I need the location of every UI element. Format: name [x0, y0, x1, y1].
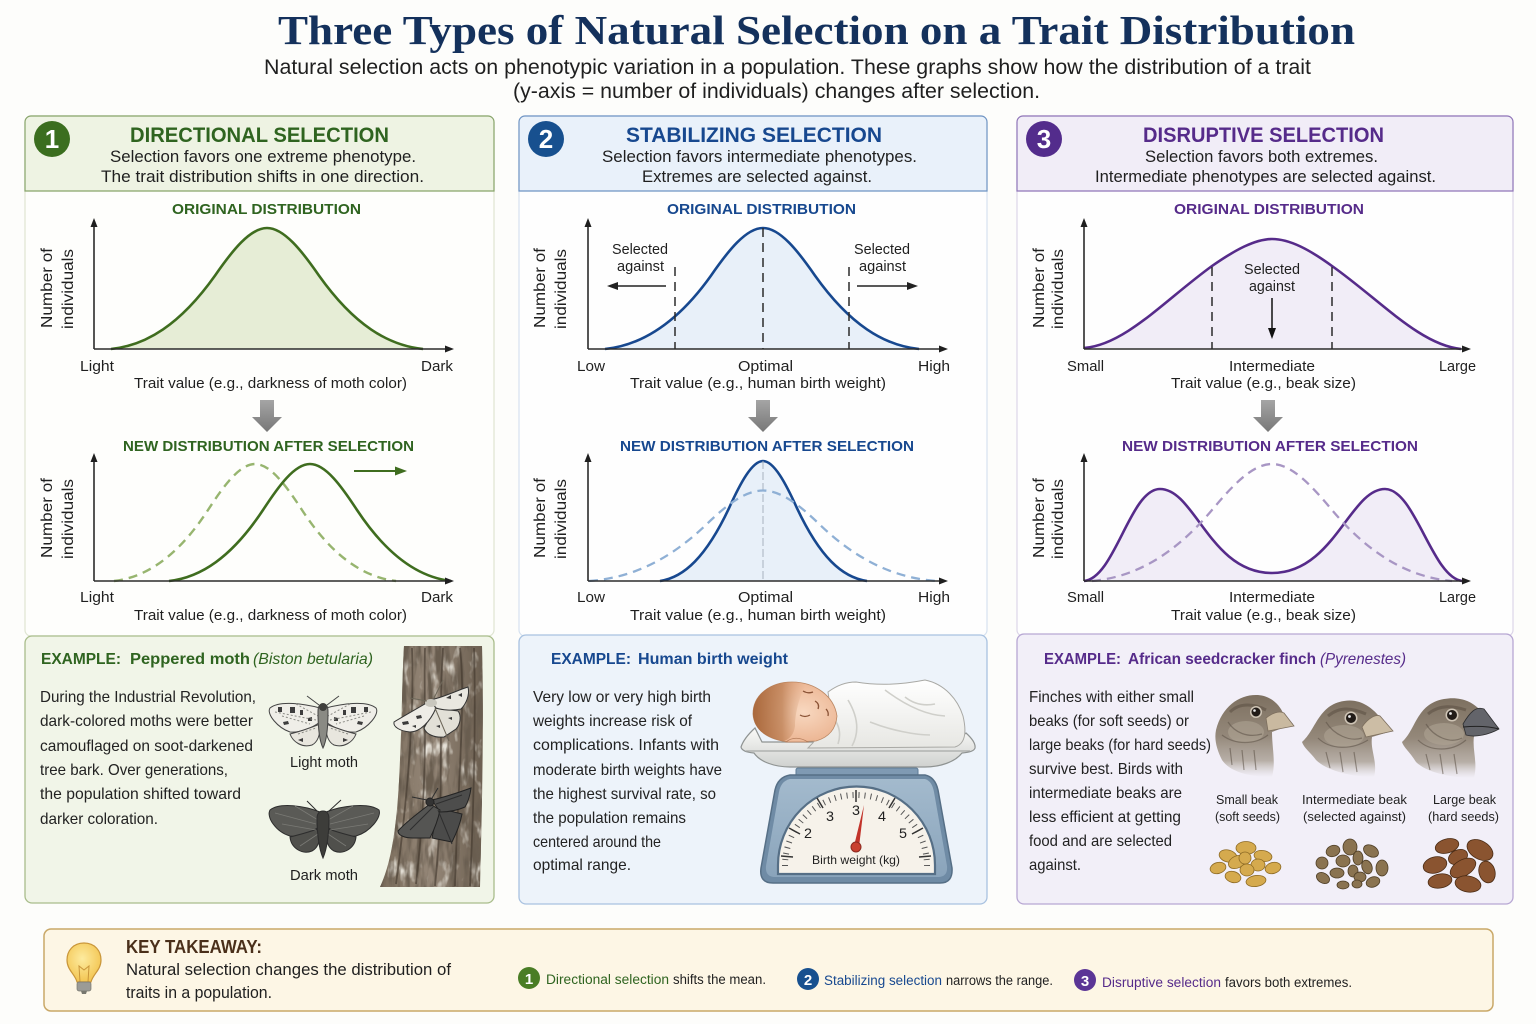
panel: example peppered moth: [25, 636, 494, 903]
example text: the population shifted toward: [40, 786, 241, 803]
example text: against.: [1029, 857, 1081, 874]
chart: original distribution, directional: ORIGINAL DISTRIBUTION: [172, 201, 361, 218]
scale body: 3: [852, 802, 860, 818]
labels: beak types: Intermediate beak: [1302, 792, 1407, 807]
example text: intermediate beaks are: [1029, 785, 1182, 802]
chart: new distribution, disruptive: Intermediate: [1229, 589, 1315, 606]
summary: disruptive: Disruptive selection: [1102, 975, 1221, 990]
callout: selected against, left: [607, 242, 668, 290]
chart: new distribution, directional: Number of: [39, 477, 56, 558]
callout: selected against, center: against: [1249, 279, 1295, 295]
callout: selected against, right: [854, 242, 918, 290]
header: directional selection: [25, 116, 494, 191]
icon: small-beak finch: [1215, 695, 1294, 777]
example heading: [551, 651, 789, 668]
icon: light bulb: [67, 943, 101, 994]
icon: dark moth on bark: [398, 788, 471, 844]
chart: new distribution, stabilizing: [532, 438, 950, 624]
chart: original distribution, directional: Dark: [421, 358, 454, 375]
chart: new distribution, disruptive: Trait value (e.g., beak size): [1171, 607, 1356, 624]
example heading: (Pyrenestes): [1320, 651, 1406, 668]
chart: original distribution, disruptive: Small: [1067, 358, 1104, 375]
icon: light moth: [269, 696, 377, 748]
example text: less efficient at getting: [1029, 809, 1181, 826]
header: stabilizing selection: Extremes are selected against.: [642, 168, 872, 186]
chart: original distribution, directional: Light: [80, 358, 115, 375]
scale body: 5: [899, 825, 907, 841]
header: stabilizing selection: 2: [539, 124, 553, 154]
arrow: original to new, stabilizing: [748, 400, 778, 432]
icon: intermediate-beak finch: [1302, 700, 1393, 777]
summary: directional: shifts the mean.: [673, 972, 766, 987]
labels: beak types: [1215, 792, 1499, 824]
chart: new distribution, directional: NEW DISTRIBUTION AFTER SELECTION: [123, 438, 414, 455]
example text: [40, 689, 256, 828]
example text: [1029, 689, 1211, 874]
example text: tree bark. Over generations,: [40, 762, 228, 779]
chart: new distribution, directional: individuals: [60, 479, 77, 559]
chart: original distribution, directional: individuals: [60, 249, 77, 329]
panel: stabilizing selection: [519, 116, 987, 636]
chart: new distribution, directional: [39, 438, 454, 624]
chart: original distribution, stabilizing: ORIGINAL DISTRIBUTION: [667, 201, 856, 218]
scale body: 2: [804, 825, 812, 841]
chart: new distribution, stabilizing: High: [918, 589, 950, 606]
chart: original distribution, stabilizing: Low: [577, 358, 605, 375]
example heading: [41, 651, 373, 668]
example text: Finches with either small: [1029, 689, 1194, 706]
header: directional selection: 1: [45, 124, 59, 154]
example text: moderate birth weights have: [533, 762, 722, 779]
example heading: Human birth weight: [638, 651, 789, 668]
summary: directional: [518, 967, 766, 989]
title: Three Types of Natural Selection on a Trait Distribution: [278, 7, 1355, 53]
header: directional selection: The trait distribution shifts in one direction.: [101, 168, 424, 186]
icon: large hard seeds: [1421, 835, 1498, 894]
chart: original distribution, stabilizing: individuals: [553, 249, 570, 329]
example heading: [1044, 651, 1406, 668]
chart: original distribution, directional: Trait value (e.g., darkness of moth color): [134, 375, 407, 392]
baby: [753, 680, 965, 748]
header: stabilizing selection: [519, 116, 987, 191]
chart: original distribution, disruptive: ORIGINAL DISTRIBUTION: [1174, 201, 1364, 218]
key takeaway text: traits in a population.: [126, 984, 272, 1002]
example text: centered around the: [533, 834, 661, 851]
icon: light moth on bark: [394, 680, 469, 741]
callout: selected against, right: Selected: [854, 242, 910, 258]
scale body: 4: [878, 808, 886, 824]
example text: darker coloration.: [40, 811, 158, 828]
arrow: original to new, disruptive: [1253, 400, 1283, 432]
chart: new distribution, stabilizing: Low: [577, 589, 605, 606]
icon: small soft seeds: [1209, 842, 1282, 888]
example text: complications. Infants with: [533, 737, 719, 754]
panel: directional selection: [25, 116, 494, 636]
panel: example african seedcracker finch: [1017, 634, 1513, 904]
header: disruptive selection: 3: [1037, 124, 1051, 154]
icon: intermediate seeds: [1314, 839, 1388, 889]
example text: During the Industrial Revolution,: [40, 689, 256, 706]
subtitle: [264, 56, 1311, 103]
illustration: tree with moths: [380, 646, 483, 887]
callout: selected against, right: against: [859, 259, 906, 275]
header: stabilizing selection: STABILIZING SELECTION: [626, 124, 882, 147]
header: disruptive selection: Selection favors both extremes.: [1145, 148, 1378, 166]
example heading: (Biston betularia): [253, 651, 373, 668]
callout: selected against, center: Selected: [1244, 262, 1300, 278]
callout: selected against, left: Selected: [612, 242, 668, 258]
chart: new distribution, directional: Dark: [421, 589, 454, 606]
summary: directional: 1: [525, 971, 533, 988]
chart: original distribution, stabilizing: High: [918, 358, 950, 375]
subtitle: Natural selection acts on phenotypic variation in a population. These graphs show how the distribution of a trait: [264, 56, 1311, 79]
chart: original distribution, disruptive: individuals: [1050, 249, 1067, 329]
summary: directional: Directional selection: [546, 972, 669, 987]
scale body: 3: [826, 808, 834, 824]
chart: new distribution, directional: Light: [80, 589, 115, 606]
icon: dark moth: [269, 800, 379, 858]
example text: the population remains: [533, 810, 686, 827]
label: dark moth: Dark moth: [290, 868, 358, 884]
chart: new distribution, disruptive: Large: [1439, 589, 1476, 606]
illustration: baby on scale: [741, 680, 975, 883]
key takeaway text: KEY TAKEAWAY:: [126, 937, 262, 957]
example text: dark-colored moths were better: [40, 713, 254, 730]
example text: weights increase risk of: [532, 713, 693, 730]
example heading: African seedcracker finch: [1128, 651, 1316, 668]
chart: original distribution, directional: [39, 201, 454, 392]
header: disruptive selection: DISRUPTIVE SELECTION: [1143, 124, 1384, 147]
example text: Very low or very high birth: [533, 689, 711, 706]
callout: selected against, center: [1244, 262, 1300, 339]
chart: original distribution, stabilizing: [532, 201, 950, 392]
chart: new distribution, stabilizing: NEW DISTRIBUTION AFTER SELECTION: [620, 438, 914, 455]
chart: new distribution, stabilizing: Number of: [532, 477, 549, 558]
callout: selected against, left: against: [617, 259, 664, 275]
labels: beak types: (hard seeds): [1428, 809, 1499, 824]
summary: disruptive: [1074, 969, 1352, 991]
panel: disruptive selection: [1017, 116, 1513, 636]
labels: beak types: (selected against): [1303, 809, 1406, 824]
example text: the highest survival rate, so: [533, 786, 716, 803]
example heading: EXAMPLE:: [41, 651, 121, 668]
example text: optimal range.: [533, 857, 631, 874]
key takeaway text: Natural selection changes the distribution of: [126, 961, 451, 979]
summary: stabilizing: Stabilizing selection: [824, 973, 942, 988]
header: stabilizing selection: Selection favors intermediate phenotypes.: [602, 148, 917, 166]
chart: new distribution, disruptive: [1031, 438, 1476, 624]
chart: new distribution, stabilizing: Trait value (e.g., human birth weight): [630, 607, 886, 624]
tray: [741, 728, 975, 767]
summary: stabilizing: 2: [804, 972, 812, 989]
example text: [532, 689, 722, 874]
chart: new distribution, stabilizing: individuals: [553, 479, 570, 559]
summary: disruptive: 3: [1081, 973, 1089, 990]
header: directional selection: DIRECTIONAL SELECTION: [130, 124, 389, 147]
example text: survive best. Birds with: [1029, 761, 1183, 778]
summary: disruptive: favors both extremes.: [1225, 975, 1352, 990]
key takeaway text: [126, 937, 451, 1002]
chart: original distribution, directional: Number of: [39, 247, 56, 328]
example text: food and are selected: [1029, 833, 1172, 850]
example heading: Peppered moth: [130, 651, 250, 668]
scale body: Birth weight (kg): [812, 853, 900, 867]
panel: example human birth weight: [519, 635, 987, 904]
panel: key takeaway: [44, 929, 1493, 1011]
header: directional selection: Selection favors one extreme phenotype.: [110, 148, 416, 166]
chart: original distribution, stabilizing: Optimal: [738, 358, 793, 375]
chart: original distribution, disruptive: Number of: [1031, 247, 1048, 328]
chart: new distribution, disruptive: Small: [1067, 589, 1104, 606]
chart: new distribution, disruptive: individuals: [1050, 479, 1067, 559]
summary: stabilizing: narrows the range.: [946, 973, 1053, 988]
icon: large-beak finch: [1402, 698, 1499, 778]
chart: original distribution, stabilizing: Trait value (e.g., human birth weight): [630, 375, 886, 392]
example text: camouflaged on soot-darkened: [40, 738, 253, 755]
subtitle: (y-axis = number of individuals) changes after selection.: [513, 80, 1040, 103]
chart: original distribution, disruptive: [1031, 201, 1476, 392]
chart: original distribution, stabilizing: Number of: [532, 247, 549, 328]
labels: beak types: Small beak: [1216, 792, 1278, 807]
chart: original distribution, disruptive: Trait value (e.g., beak size): [1171, 375, 1356, 392]
example text: large beaks (for hard seeds): [1029, 737, 1211, 754]
summary: stabilizing: [797, 968, 1053, 990]
example text: beaks (for soft seeds) or: [1029, 713, 1190, 730]
chart: new distribution, disruptive: Number of: [1031, 477, 1048, 558]
labels: beak types: Large beak: [1433, 792, 1496, 807]
example heading: EXAMPLE:: [551, 651, 631, 668]
arrow: shift to the right: [354, 466, 407, 476]
chart: original distribution, disruptive: Intermediate: [1229, 358, 1315, 375]
arrow: original to new, directional: [252, 400, 282, 432]
chart: new distribution, disruptive: NEW DISTRIBUTION AFTER SELECTION: [1122, 438, 1418, 455]
label: light moth: Light moth: [290, 755, 358, 771]
scale body: [761, 768, 952, 883]
chart: original distribution, disruptive: Large: [1439, 358, 1476, 375]
chart: new distribution, stabilizing: Optimal: [738, 589, 793, 606]
chart: new distribution, directional: Trait value (e.g., darkness of moth color): [134, 607, 407, 624]
labels: beak types: (soft seeds): [1215, 809, 1280, 824]
example heading: EXAMPLE:: [1044, 651, 1121, 668]
header: disruptive selection: Intermediate phenotypes are selected against.: [1095, 168, 1436, 186]
header: disruptive selection: [1017, 116, 1513, 191]
